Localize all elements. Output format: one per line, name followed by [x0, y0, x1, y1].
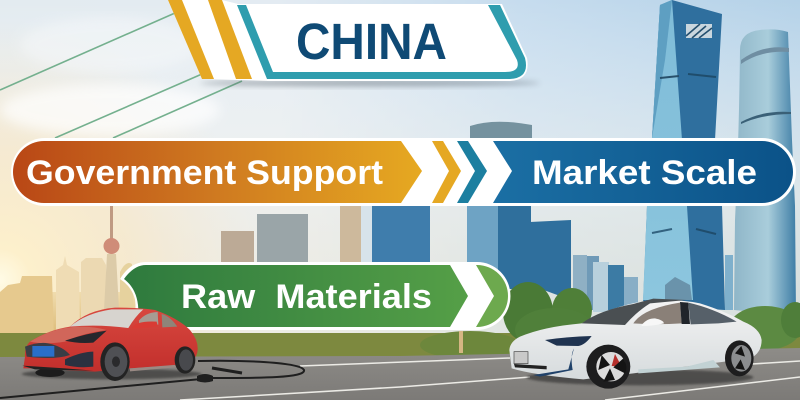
side sill: [130, 364, 182, 371]
title banner: CHINA: [168, 0, 540, 86]
mirror: [642, 318, 664, 326]
label: Government Support: Government Support: [26, 154, 383, 192]
bar: Raw Materials: [120, 262, 510, 330]
skyscraper: round tower: [725, 29, 796, 316]
windshield: [70, 309, 143, 328]
segment: Market Scale: [493, 141, 793, 203]
number plate: [514, 352, 528, 364]
charging cable: [0, 361, 304, 398]
front tyre under bumper: [35, 368, 65, 377]
label: Market Scale: Market Scale: [532, 154, 757, 192]
chevron: gold: [432, 141, 461, 203]
skyscraper: twisted tower: [643, 0, 725, 310]
segment: green: [124, 265, 468, 327]
title text: CHINA: [296, 13, 447, 70]
bar white outline: [11, 138, 796, 206]
stripe white backing: [168, 0, 270, 81]
trees: [0, 282, 800, 361]
windshield and roof: [582, 299, 687, 325]
hood highlight: [30, 327, 107, 343]
red electric car: [22, 308, 202, 381]
rear wheel: [175, 346, 195, 374]
front side window: [139, 312, 158, 325]
green diagonal lines: [0, 13, 242, 138]
chevron: light green: [476, 265, 508, 327]
bar white outline: [120, 262, 510, 330]
skyline: centre buildings: [221, 122, 638, 312]
ground road: [0, 348, 800, 400]
front side window: [633, 303, 682, 324]
car body: [23, 308, 198, 372]
front wheel: [586, 345, 630, 389]
chevron: teal: [457, 141, 487, 203]
lower vent: [65, 352, 93, 367]
bar: Government Support + Market Scale: [11, 138, 796, 206]
headlight: [545, 336, 592, 346]
skyline: left silhouette with TV tower: [0, 205, 135, 342]
mirror: [132, 322, 158, 328]
side sill: [638, 360, 720, 373]
car body: [509, 300, 762, 379]
label: Raw Materials: Raw Materials: [181, 278, 432, 316]
rear side window: [688, 303, 737, 324]
banner plate: [237, 4, 528, 81]
rear wheel: [725, 340, 754, 376]
gold stripes: [168, 0, 252, 79]
blue trim: [533, 348, 574, 377]
headlight: [65, 331, 107, 343]
teal border: [237, 5, 526, 79]
white electric car: [509, 299, 762, 389]
rear side window: [162, 314, 177, 327]
grille and plate: [25, 343, 70, 358]
pillar: [680, 302, 690, 324]
front wheel: [100, 342, 130, 381]
segment: Government Support: [13, 141, 422, 203]
banner shadow: [200, 80, 540, 86]
